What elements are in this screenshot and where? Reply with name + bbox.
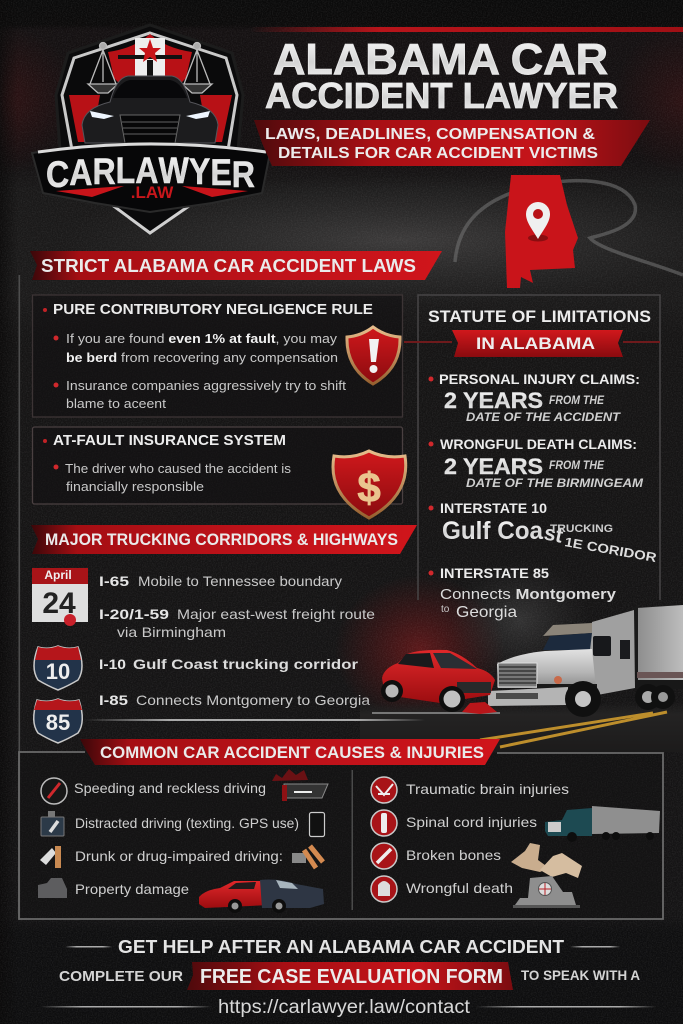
icon: dollar shield [333,451,406,518]
car front [82,76,218,143]
icon: calendar April 24 [32,568,88,626]
wrongful death claims: DATE OF THE BIRMINGEAM [466,478,643,490]
panel: causes and injuries [19,739,663,919]
sleeper cab [588,610,635,696]
to speak with: TO SPEAK WITH A [521,967,640,983]
roof visor [543,623,592,636]
chassis [537,684,597,688]
injury: spinal cord: Spinal cord injuries [406,814,537,830]
wrongful death claims: WRONGFUL DEATH CLAIMS: [440,436,637,452]
bullet text: The driver who caused the accident is [65,461,292,476]
windshield [543,633,592,650]
interstate 10: Gulf Coa [442,517,544,545]
subtitle ribbon: DETAILS FOR CAR ACCIDENT VICTIMS [278,145,598,162]
cause: speeding [41,769,328,804]
title: ACCIDENT LAWYER [265,75,618,116]
cause: property damage: Property damage [75,881,189,897]
icon: warning shield [347,327,400,384]
wrongful death claims [440,436,643,490]
cause: distracted: Distracted driving (texting. GPS use) [75,815,299,831]
flag with star [108,34,192,96]
I-20/I-59: via Birmingham [117,624,226,640]
scales of justice [88,42,212,93]
ribbon: in Alabama [452,330,623,357]
lower shield point [92,170,212,233]
logo wordmark: CARLAWYER [46,150,255,195]
wheels [565,681,675,717]
illustration: red car [381,650,497,714]
red wings [56,186,248,197]
bullet text continued: financially responsible [66,479,204,494]
icon: interstate 10 shield [34,646,82,690]
interstate 85: Georgia [456,604,517,621]
road scribble [455,181,683,275]
I-85: Connects Montgomery to Georgia [136,692,370,708]
personal injury claims: PERSONAL INJURY CLAIMS: [439,371,640,387]
panel heading: STATUTE OF LIMITATIONS [428,307,651,326]
grille [498,663,537,687]
wrongful death claims: FROM THE [549,460,604,472]
shield body [56,25,243,150]
injury: wrongful death: Wrongful death [406,880,513,896]
icon: location pin [526,202,550,242]
I-20/I-59: I-20/1-59 [99,606,169,622]
personal injury claims [439,371,640,424]
panel heading: PURE CONTRIBUTORY NEGLIGENCE RULE [53,301,373,318]
bullet text 2 continued: blame to aceent [66,396,166,411]
subtitle ribbon: LAWS, DEADLINES, COMPENSATION & [265,126,595,143]
I-10: I-10 [99,656,126,672]
complete our: COMPLETE OUR [59,968,183,985]
interstate 85: INTERSTATE 85 [440,565,549,581]
I-65: Mobile to Tennessee boundary [138,573,342,589]
injury: broken bones [371,843,501,869]
icon: interstate 85 shield [34,699,82,743]
footer call to action [40,937,656,1018]
illustration: trailer truck [488,605,683,717]
injury: spinal cord [371,810,537,836]
logo: CarLawyer.law shield [32,25,270,233]
red side panels [69,95,232,142]
interstate 10: TRUCKING [550,523,613,535]
interstate 85 [440,565,617,621]
Alabama map with pin [505,175,578,288]
heading: causes [80,739,500,765]
panel: statute of limitations [404,295,660,621]
I-65: I-65 [99,573,129,589]
icon: dollar shield: $ [357,464,381,511]
bullet text 2: Insurance companies aggressively try to shift [66,378,346,393]
trailer [637,605,683,680]
footer heading: GET HELP AFTER AN ALABAMA CAR ACCIDENT [118,937,564,957]
ribbon: free case evaluation: FREE CASE EVALUATION FORM [200,966,503,988]
panel: at-fault insurance [32,427,406,518]
illustration: machine base [513,876,580,908]
interstate 85: Connects Montgomery [440,586,617,603]
interstate 10: st [542,521,565,548]
bumper [488,687,568,706]
hood [497,649,596,688]
bullet text: If you are found even 1% at fault , you may [66,331,338,346]
wrongful death claims: 2 YEARS [444,454,543,479]
I-10: Gulf Coast trucking corridor [133,656,359,672]
bullet text continued: be berd from recovering any compensation [66,350,338,365]
top red line [250,27,683,32]
icon: calendar April 24: April [44,568,72,582]
interstate 10: INTERSTATE 10 [440,500,547,516]
cause: drunk driving: Drunk or drug-impaired driving: [75,848,283,864]
panel: contributory negligence [32,295,402,417]
interstate 10: 1E CORIDOR [563,534,658,565]
injury: traumatic brain: Traumatic brain injuries [406,781,569,797]
I-85: I-85 [99,692,128,708]
panel heading: AT-FAULT INSURANCE SYSTEM [53,432,286,449]
personal injury claims: 2 YEARS [444,388,543,413]
interstate 85: to [441,604,450,615]
banner [32,143,270,212]
injury: broken bones: Broken bones [406,847,501,863]
heading: strict laws: STRICT ALABAMA CAR ACCIDENT LAWS [41,256,416,276]
personal injury claims: DATE OF THE ACCIDENT [466,412,621,424]
title: ALABAMA CAR [273,35,608,84]
cause: speeding: Speeding and reckless driving [74,780,266,796]
highway list [99,573,375,708]
injury: traumatic brain [371,777,569,803]
contact URL: https://carlawyer.law/contact [218,997,471,1018]
road [85,702,683,752]
icon: interstate 85 shield: 85 [46,710,70,735]
title [265,35,618,116]
I-20/I-59: Major east-west freight route [177,606,375,622]
interstate 10 [440,500,658,565]
cause: distracted [41,811,324,836]
illustration: small truck [545,806,660,842]
subtitle ribbon [254,120,650,166]
personal injury claims: FROM THE [549,395,604,407]
ribbon: in Alabama: IN ALABAMA [476,334,595,353]
logo .LAW: .LAW [131,183,174,202]
icon: interstate 10 shield: 10 [46,659,70,684]
heading: trucking corridors [31,525,417,554]
heading: strict laws [30,251,442,280]
icon: calendar April 24: 24 [42,587,76,620]
cause: drunk driving [40,846,323,868]
heading: causes: COMMON CAR ACCIDENT CAUSES & INJURIES [100,743,484,762]
I-20/I-59 [99,606,375,640]
cause: property damage [38,878,324,913]
illustration: broken bones [511,843,582,878]
left rail [18,275,20,920]
heading: trucking corridors: MAJOR TRUCKING CORRIDORS & HIGHWAYS [45,530,398,549]
injury: wrongful death [371,876,513,902]
